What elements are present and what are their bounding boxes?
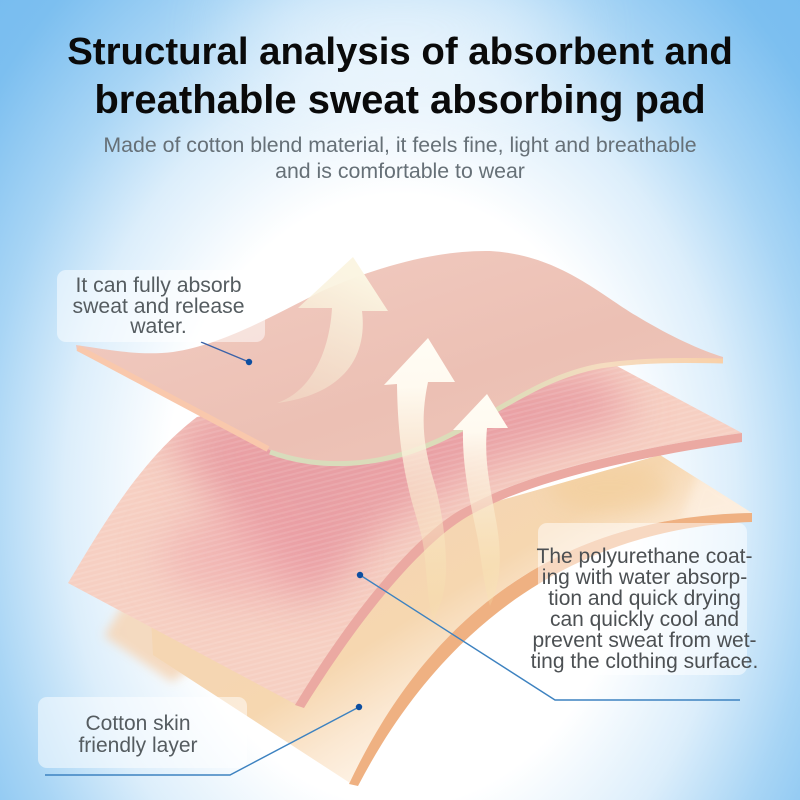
callout: cotton layer: Cotton skin [85,712,191,735]
callout: polyurethane coating: can quickly cool and [550,608,739,631]
callout: cotton layer [38,697,247,768]
callout: cotton layer: friendly layer [78,734,198,756]
callout: absorb sweat [57,270,265,342]
bottom layer: cotton [104,455,760,786]
callout: absorb sweat: It can fully absorb [75,274,242,297]
leader line: middle layer [357,572,740,700]
callout: polyurethane coating: ting the clothing surface. [531,650,758,673]
callout: polyurethane coating [538,523,747,675]
subtitle [103,133,697,183]
middle layer: polyurethane coating [68,365,742,708]
callout: absorb sweat: sweat and release [73,295,244,318]
title [67,30,733,122]
top layer: absorbent fabric [76,251,723,464]
callout: absorb sweat: water. [130,315,187,338]
subtitle: Made of cotton blend material, it feels fine, light and breathable [103,133,697,157]
leader line: top layer [201,342,252,365]
strip: cotton layer edge [349,513,752,786]
callout: polyurethane coating: The polyurethane coat- [537,545,752,568]
title: Structural analysis of absorbent and [67,30,733,73]
title: breathable sweat absorbing pad [94,78,706,122]
arrow: right rising [453,394,508,606]
callout: polyurethane coating: ing with water absorp- [542,566,747,589]
callout: polyurethane coating: tion and quick drying [548,587,741,610]
leader line: bottom layer [45,704,362,775]
callout: polyurethane coating: prevent sweat from wet- [532,629,757,652]
subtitle: and is comfortable to wear [275,159,525,183]
strip: coating layer edge [295,433,742,708]
arrow: centre rising [384,338,455,620]
arrow: left rising [277,257,388,403]
